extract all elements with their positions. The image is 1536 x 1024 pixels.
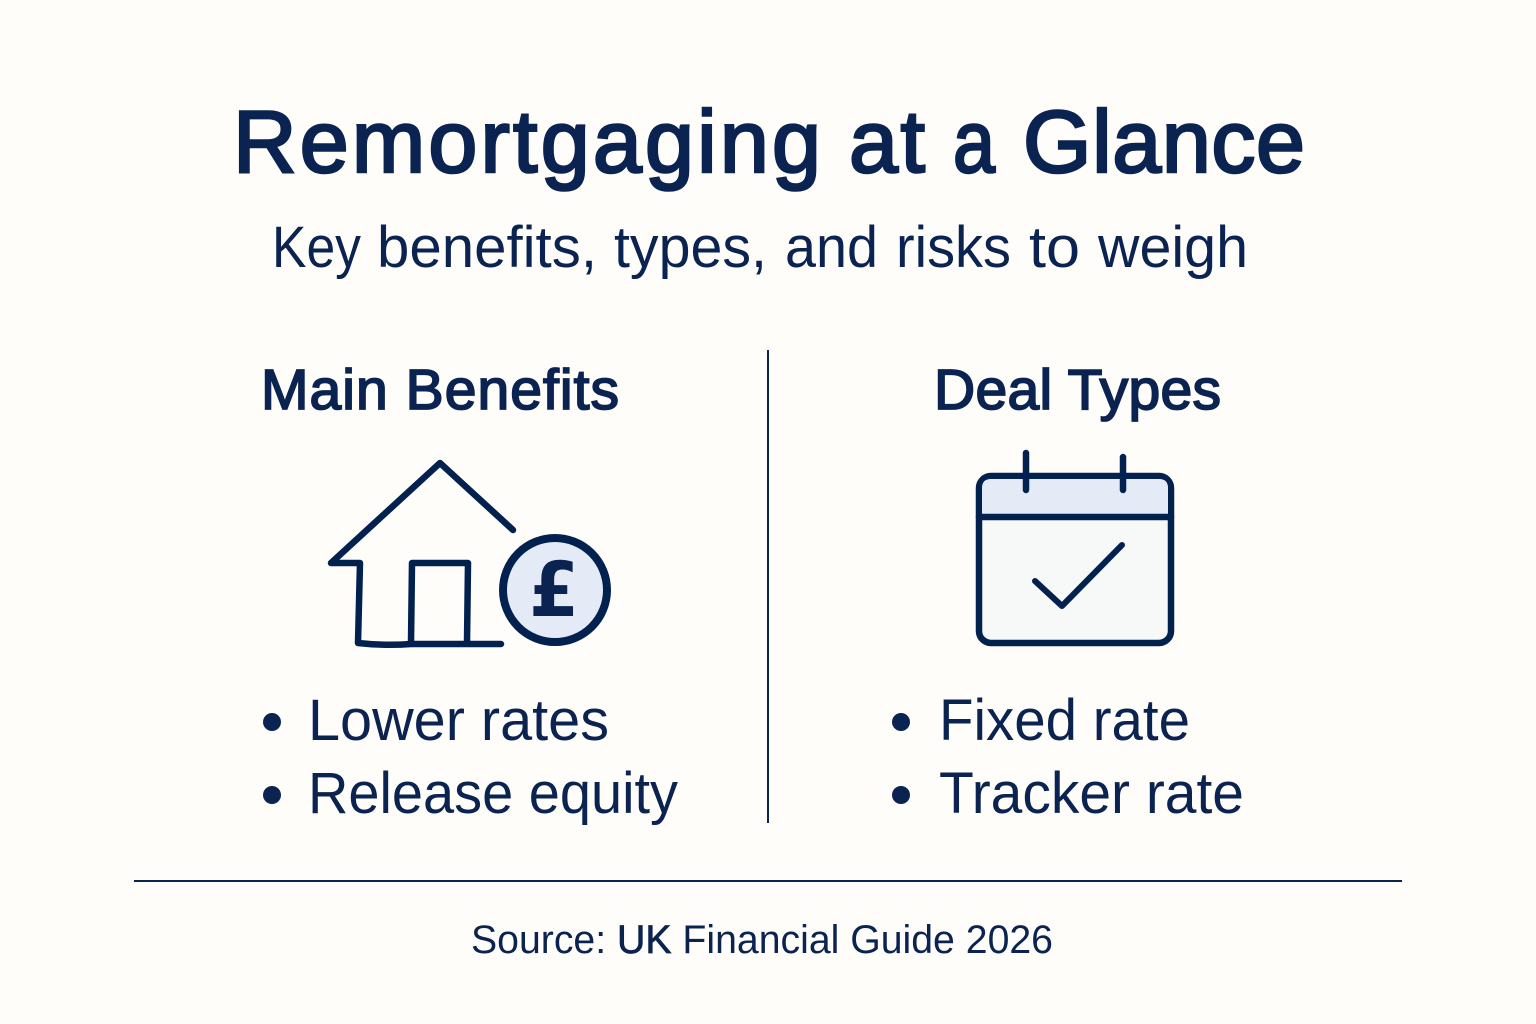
subtitle: Key <box>272 215 361 280</box>
icon: calendar with check <box>979 453 1171 643</box>
calendar outline <box>979 453 1171 517</box>
panel: deal types <box>892 358 1244 826</box>
bullet: lower rates: Lower rates <box>308 688 609 753</box>
title: Glance <box>1023 92 1305 191</box>
pound coin <box>503 538 607 642</box>
bullet list: deal types <box>892 688 1244 826</box>
title: Remortgaging <box>233 92 821 191</box>
check mark <box>1035 545 1122 606</box>
calendar header band <box>982 479 1168 517</box>
bullet: fixed rate: Fixed rate <box>939 688 1190 753</box>
bullet: tracker rate: Tracker rate <box>939 761 1244 826</box>
source note: Source: UK Financial Guide 2026 <box>471 918 1053 962</box>
heading: main benefits: Main Benefits <box>261 358 619 422</box>
title: at <box>849 92 925 191</box>
icon: house with pound coin <box>331 463 607 645</box>
subtitle: benefits, <box>377 215 597 280</box>
panel: main benefits <box>261 358 678 826</box>
bullet list: benefits <box>263 688 678 826</box>
bullet: release equity: Release equity <box>308 761 678 826</box>
heading: deal types: Deal Types <box>934 358 1221 422</box>
calendar body <box>979 476 1171 643</box>
subtitle: to <box>1029 215 1080 280</box>
subtitle: weigh <box>1097 215 1248 280</box>
house outline <box>331 463 513 645</box>
subtitle: and <box>785 215 878 280</box>
subtitle: risks <box>896 215 1011 280</box>
door <box>411 563 468 643</box>
pound symbol: £ <box>529 545 579 634</box>
title: a <box>953 92 995 191</box>
subtitle: types, <box>614 215 767 280</box>
